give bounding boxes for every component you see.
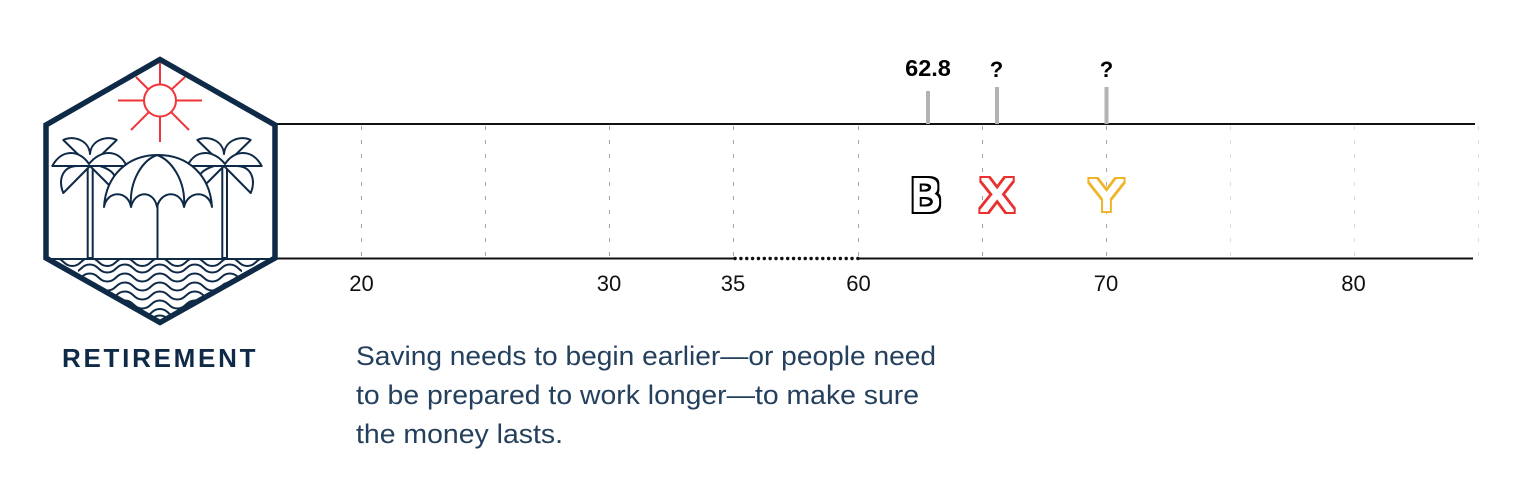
age labels: 70 bbox=[1094, 271, 1118, 296]
icon: palm tree right bbox=[187, 138, 262, 258]
axis line: bottom with dotted career gap bbox=[272, 258, 1473, 260]
marker: 62.8: 62.8 bbox=[905, 55, 951, 81]
heading: RETIREMENT bbox=[62, 343, 256, 373]
timeline chart bbox=[272, 55, 1478, 296]
icon: sun bbox=[118, 63, 202, 142]
description text bbox=[356, 341, 936, 449]
age labels: 30 bbox=[597, 271, 621, 296]
age labels: 35 bbox=[721, 271, 745, 296]
icon: sea waves bbox=[52, 258, 270, 318]
age labels: 60 bbox=[846, 271, 871, 296]
axis line: top bbox=[272, 123, 1475, 125]
age labels: 80 bbox=[1341, 271, 1366, 296]
icon: palm tree left bbox=[52, 138, 127, 258]
generation letter X: X bbox=[980, 169, 1014, 221]
retirement hexagon icon bbox=[43, 56, 278, 326]
age labels bbox=[349, 271, 1366, 296]
marker: unknown generation X: ? bbox=[990, 57, 1003, 82]
age labels: 20 bbox=[349, 271, 374, 296]
hexagon outline bbox=[46, 60, 275, 322]
icon: beach umbrella bbox=[104, 155, 212, 258]
description text: the money lasts. bbox=[356, 419, 563, 449]
marker: unknown generation X bbox=[990, 57, 1003, 124]
description text: Saving needs to begin earlier—or people need bbox=[356, 341, 936, 371]
marker: 62.8 bbox=[905, 55, 951, 124]
marker: unknown generation Y bbox=[1100, 57, 1113, 124]
marker: unknown generation Y: ? bbox=[1100, 57, 1113, 82]
generation letter Y: Y bbox=[1089, 171, 1124, 220]
description text: to be prepared to work longer—to make sure bbox=[356, 380, 919, 410]
generation letter B: B bbox=[911, 169, 940, 221]
